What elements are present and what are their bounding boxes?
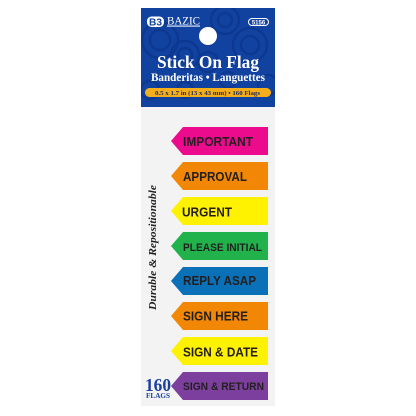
flag: important bbox=[171, 127, 268, 155]
flag: sign here: SIGN HERE bbox=[183, 308, 248, 324]
side text: durable: Durable & Repositionable bbox=[148, 185, 159, 311]
flag: sign here bbox=[171, 302, 268, 330]
flag: sign and date: SIGN & DATE bbox=[183, 344, 258, 360]
logo: BAZIC: B3 bbox=[149, 16, 162, 28]
flag: urgent bbox=[171, 197, 268, 225]
subtitle: Banderitas • Languettes bbox=[151, 72, 265, 84]
hang hole bbox=[199, 27, 217, 45]
badge: 160 flags: FLAGS bbox=[146, 392, 170, 400]
flag: sign and date bbox=[171, 337, 268, 365]
size pill: 0.5 x 1.7 in (13 x 43 mm) • 160 Flags bbox=[155, 90, 261, 97]
flag: important: IMPORTANT bbox=[183, 134, 253, 149]
panel: package card bbox=[141, 107, 275, 406]
flag: please initial bbox=[171, 232, 268, 260]
flag: approval: APPROVAL bbox=[183, 169, 247, 184]
title: Stick On Flag bbox=[157, 52, 259, 72]
flag: urgent: URGENT bbox=[182, 204, 232, 220]
badge: 160 flags: 160 bbox=[145, 375, 171, 395]
flag: reply asap: REPLY ASAP bbox=[183, 273, 256, 288]
logo: BAZIC: BAZIC bbox=[167, 14, 200, 28]
flag: sign and return bbox=[171, 372, 268, 400]
flag: sign and return: SIGN & RETURN bbox=[183, 381, 264, 393]
item number badge: 5156 bbox=[252, 20, 266, 26]
logo: BAZIC bbox=[147, 14, 200, 28]
flag: approval bbox=[171, 162, 268, 190]
flag: please initial: PLEASE INITIAL bbox=[183, 242, 262, 254]
panel: blue header bbox=[141, 6, 278, 107]
flag: reply asap bbox=[171, 267, 268, 295]
